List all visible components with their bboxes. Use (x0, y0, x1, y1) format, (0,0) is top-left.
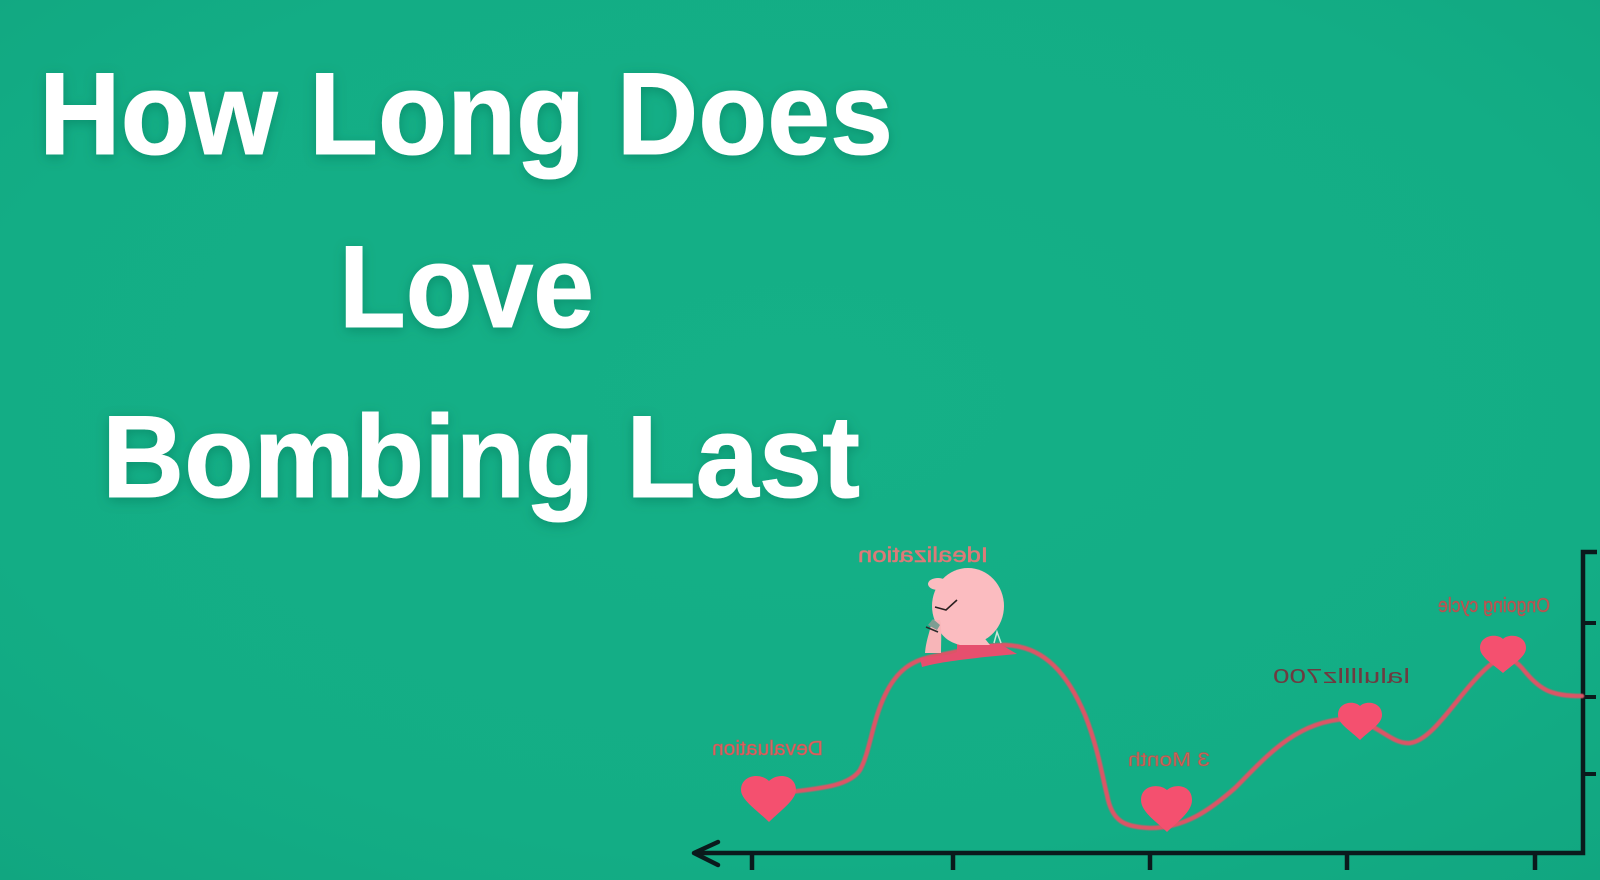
icon: heart start (741, 776, 796, 822)
label: devaluation: Devaluation (712, 738, 823, 760)
title: Love (339, 221, 594, 352)
line chart (694, 544, 1597, 870)
label: middle stage: lalullllz700 (1273, 666, 1410, 688)
love bombing curve (790, 645, 1582, 828)
icon: heart peak (1480, 636, 1526, 673)
title (39, 48, 893, 522)
axes (694, 552, 1597, 870)
icon: heart low point (1141, 786, 1192, 832)
label: ongoing: Ongoing cycle (1438, 595, 1550, 617)
plateau base (920, 644, 1017, 667)
icon: pink figure (925, 568, 1004, 653)
title: How Long Does (39, 48, 893, 179)
icon: heart middle (1338, 703, 1382, 740)
label: idealization: Idealization (858, 544, 988, 567)
title: Bombing Last (102, 391, 860, 522)
label: three months: 3 Month (1128, 750, 1210, 771)
